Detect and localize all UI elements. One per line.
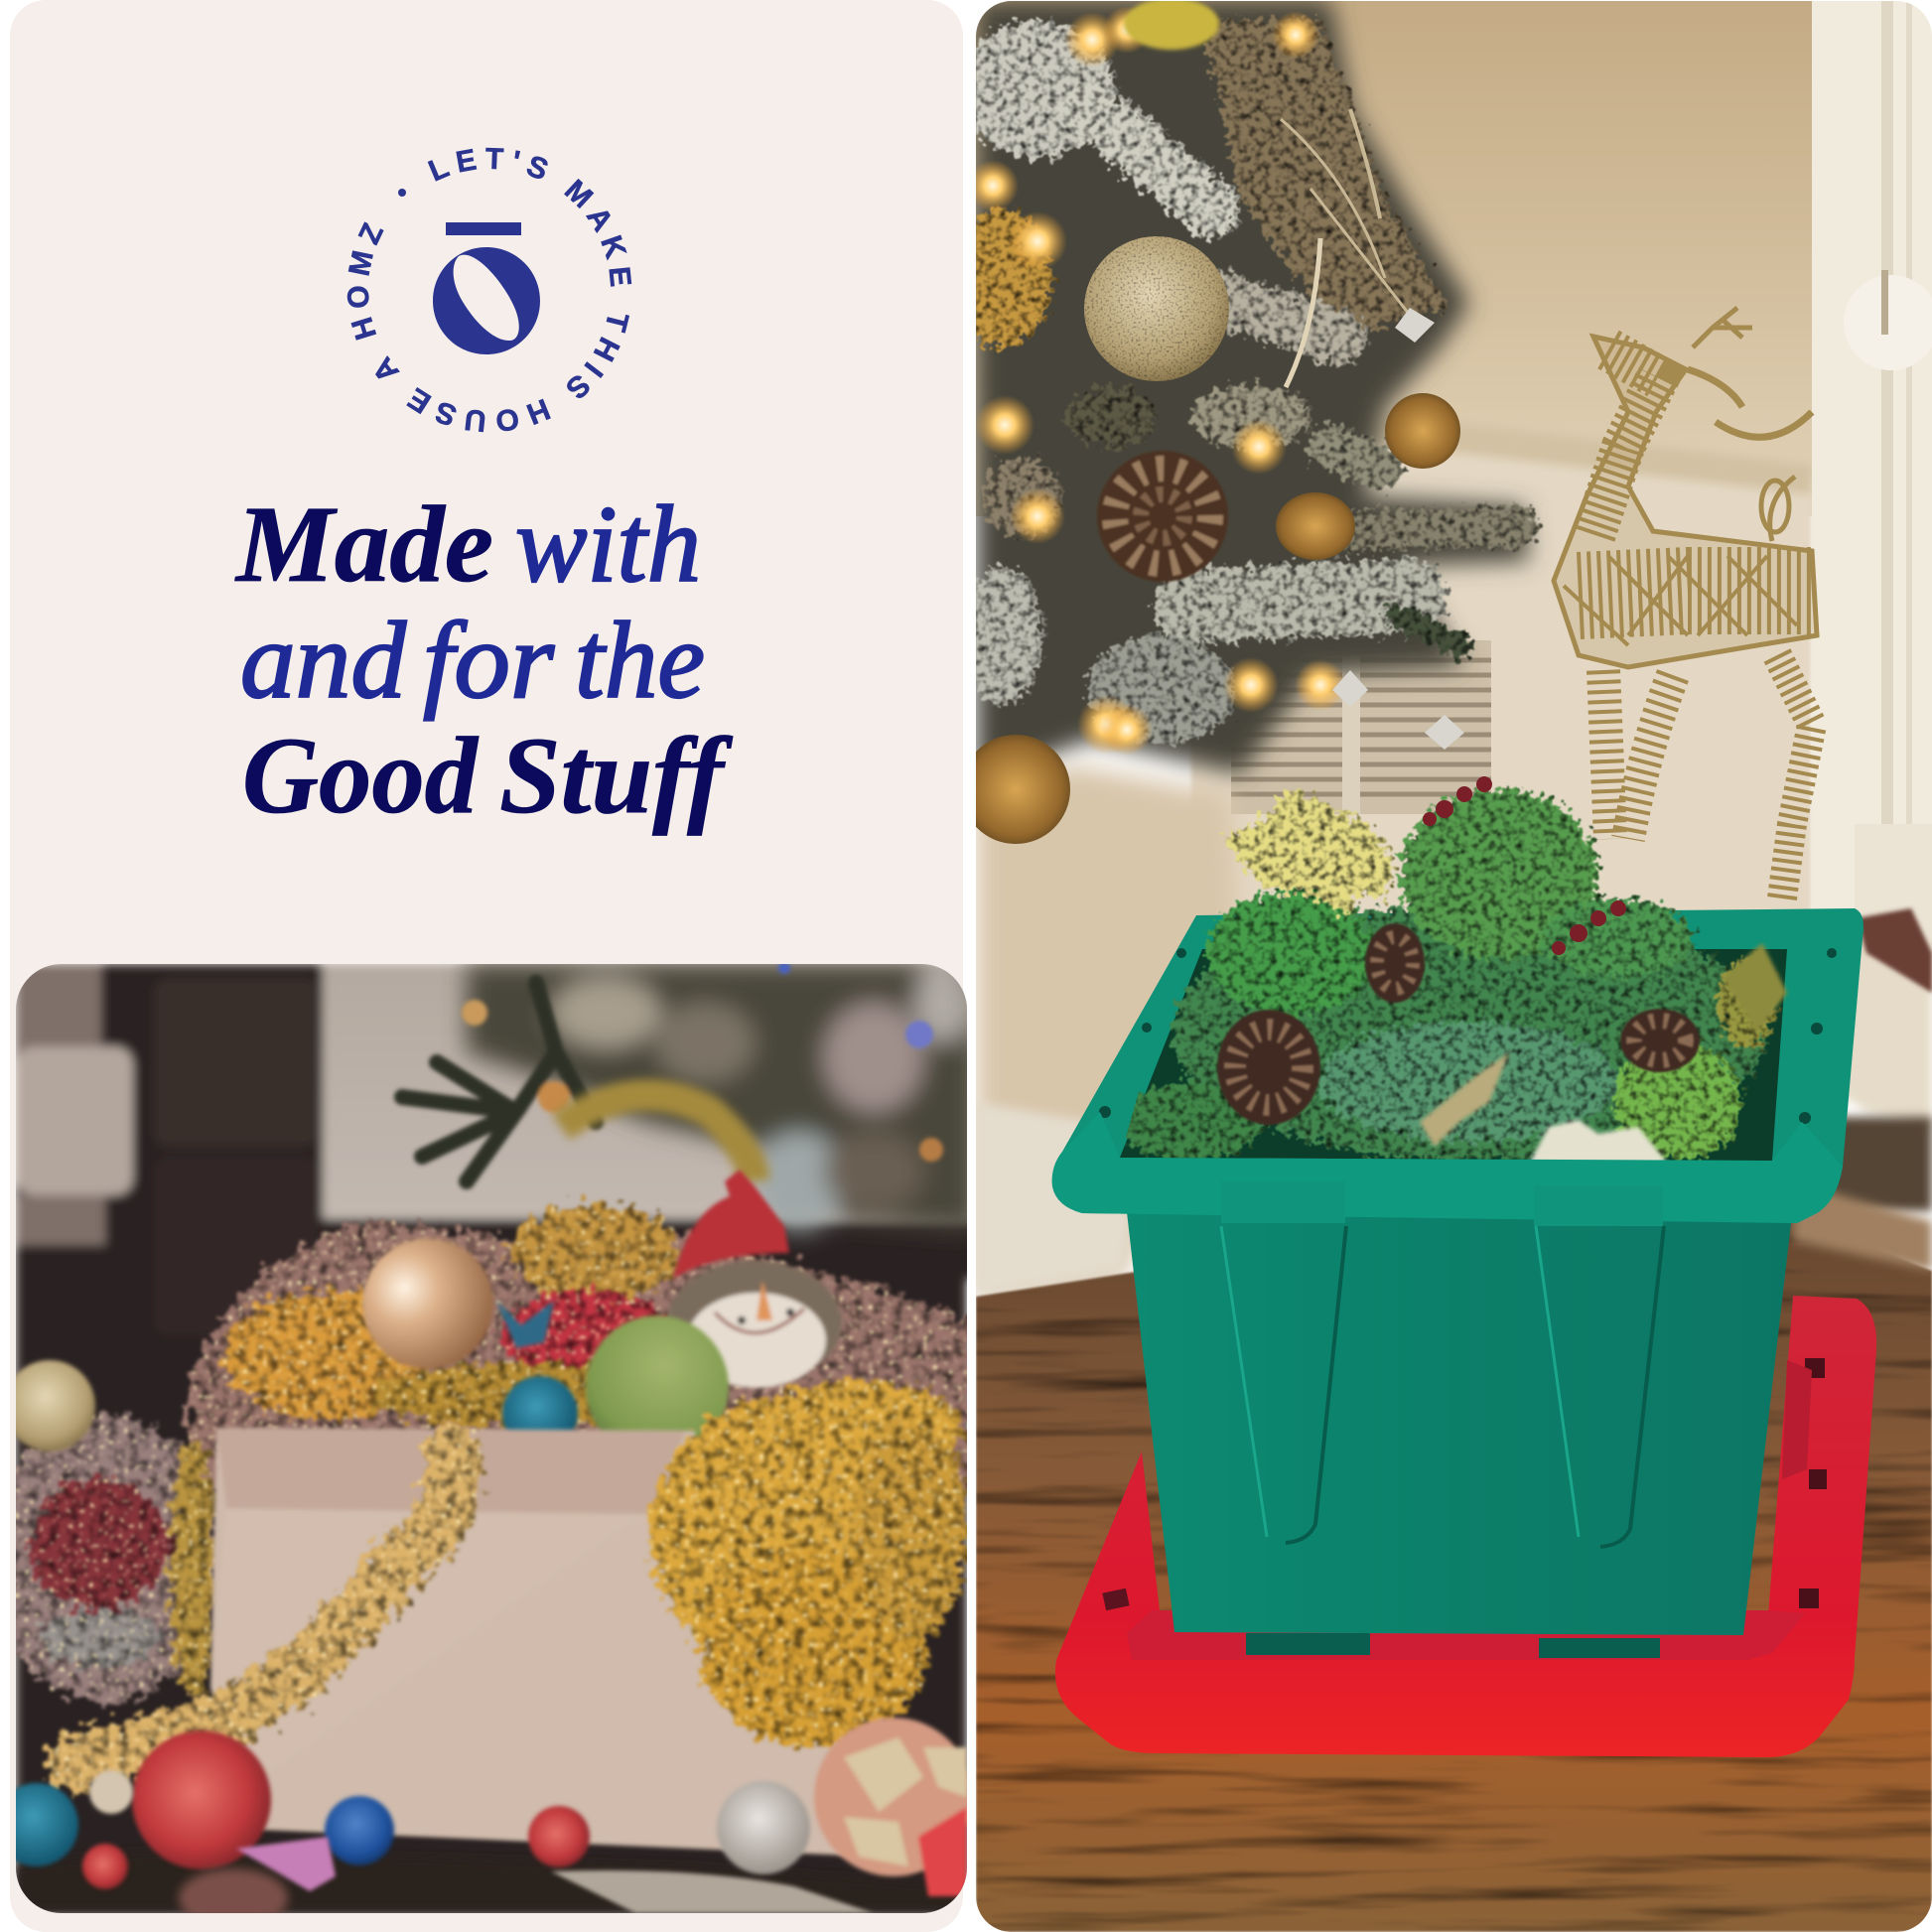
heading line 2: for (423, 600, 555, 721)
heading line 2: the (575, 600, 705, 721)
bin interior (1120, 949, 1787, 1161)
snowman (667, 1170, 842, 1388)
brown ornament bottom (179, 1868, 288, 1928)
logo: circular badge (347, 147, 631, 433)
table surface (16, 1862, 964, 1913)
vent (1231, 640, 1491, 814)
bin rim (1052, 908, 1863, 1223)
patterned ball (814, 1718, 973, 1896)
small ball white (89, 1770, 133, 1814)
red base (1055, 1296, 1876, 1757)
pale floor patch (1793, 1181, 1932, 1271)
heading line 3: Stuff (499, 715, 733, 836)
tree skirt left (976, 764, 1241, 1297)
crystal drops (1332, 308, 1464, 750)
gold glitter ornament (1084, 236, 1229, 381)
heading line 2 (240, 600, 705, 721)
heading line 2: and (240, 600, 407, 721)
door tag (1844, 275, 1932, 370)
pale skirt lower (976, 1102, 1132, 1297)
yellow leaf ornament (1124, 0, 1219, 50)
gold poinsettia (1223, 789, 1395, 918)
lower wall (1191, 392, 1812, 953)
blue ball (325, 1796, 394, 1865)
small blue ball (498, 1372, 582, 1434)
bin front rim (1052, 1112, 1843, 1223)
white flower (1529, 1120, 1668, 1164)
wood floor (976, 1211, 1932, 1932)
bin rib right (1536, 1226, 1664, 1547)
panel: cream card (10, 0, 963, 1932)
logo ring text: LET'S MAKE THIS HOUSE A HOMZ (347, 147, 631, 433)
gold tinsel (74, 1380, 968, 1762)
pinecone scales (1235, 937, 1686, 1105)
heading (234, 483, 733, 836)
gold ball upper left (4, 1360, 95, 1451)
heading line 1 (234, 483, 701, 605)
red ball large (132, 1730, 271, 1869)
photo: box of ornaments and tinsel (0, 962, 978, 1928)
tree body (953, 0, 1529, 784)
blue butterfly (496, 1301, 554, 1348)
photo: green storage bin on red base (953, 0, 1932, 1932)
tree branches and bokeh (402, 962, 943, 1181)
red ball center (528, 1806, 590, 1867)
peach ornament (362, 1238, 493, 1369)
gold garland background (561, 1095, 755, 1181)
gold flower small (1420, 1052, 1509, 1147)
heading line 3: Good (242, 715, 480, 836)
silver ball (717, 1781, 810, 1874)
tinsel mound (0, 1203, 973, 1703)
rim shoulder detail (1221, 1181, 1663, 1226)
lower left ornament (961, 735, 1070, 844)
golden ornament on branch (1276, 492, 1355, 560)
wall moulding (1191, 392, 1812, 494)
heading line 1: Made (234, 483, 493, 605)
blurred tree (467, 963, 978, 1231)
door frame (1812, 0, 1932, 993)
red berries (1423, 776, 1626, 955)
logo letter (433, 247, 540, 354)
heading line 3 (242, 715, 733, 836)
pinecones in bin (1217, 923, 1700, 1125)
cardboard box (210, 1428, 894, 1857)
heading line 1: with (515, 483, 701, 605)
gold leaf right (1723, 943, 1787, 1033)
wall (976, 0, 1820, 516)
pink gem (236, 1837, 336, 1891)
bin rib left (1221, 1226, 1346, 1543)
tree lights (967, 6, 1346, 756)
pinecone (1097, 451, 1228, 582)
blurred room background (16, 964, 978, 1913)
bin body (1126, 1203, 1793, 1635)
amber ornament (1385, 393, 1460, 469)
skirt right (1837, 943, 1932, 1127)
plaid cloth (1857, 908, 1932, 993)
dark floor right (1787, 1117, 1932, 1211)
green ball (586, 1315, 729, 1458)
reindeer (1554, 308, 1817, 898)
small red ball (82, 1844, 128, 1889)
teal ball (0, 1783, 78, 1866)
wreath greenery (1122, 789, 1777, 1162)
silver tray (551, 1870, 874, 1913)
rim holes (1099, 948, 1837, 1124)
